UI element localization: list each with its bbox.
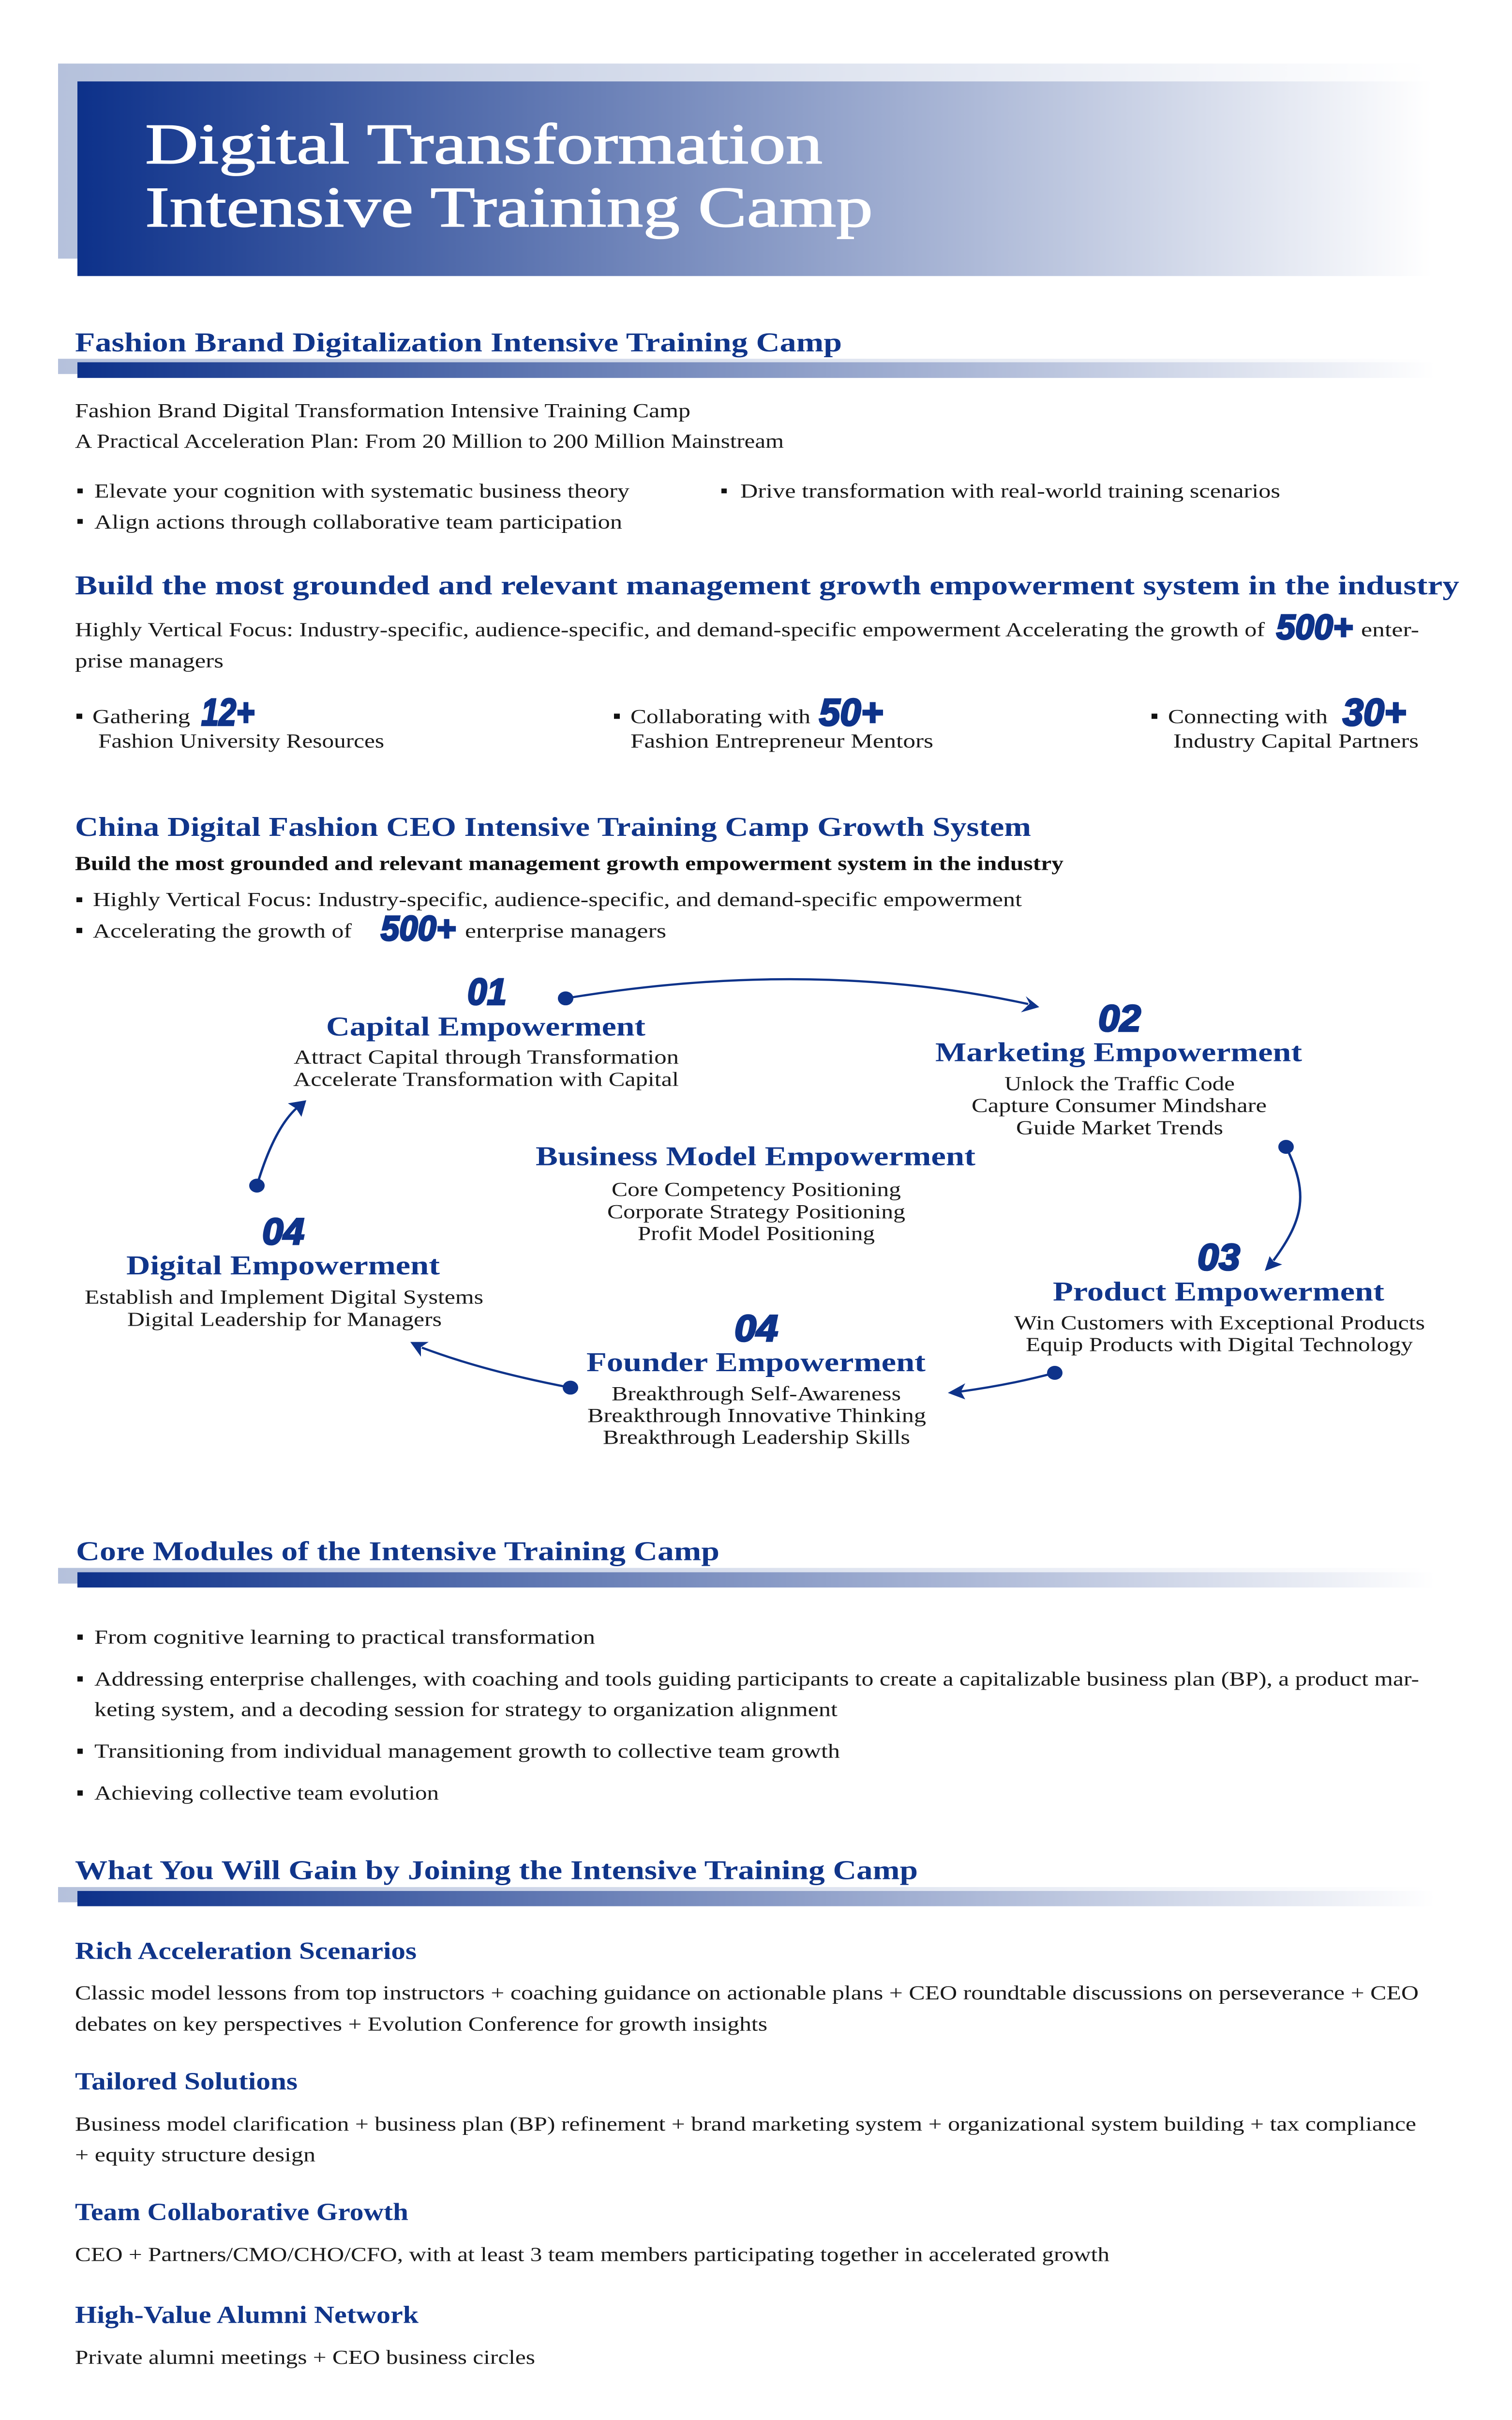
center: business model: Business Model Empowerment bbox=[536, 1141, 975, 1171]
bullet list: keting system, and a decoding session for strategy to organization alignment bbox=[94, 1698, 838, 1721]
node 02: marketing: Marketing Empowerment bbox=[935, 1037, 1302, 1067]
heading: Build the most grounded and relevant management growth empowerment system in the industry bbox=[75, 570, 1459, 600]
stat: 50+: 50+ bbox=[819, 691, 883, 734]
center: business model: Profit Model Positioning bbox=[638, 1223, 875, 1245]
gain: rich acceleration scenarios bbox=[75, 1937, 1419, 2035]
paragraph: enter- bbox=[1361, 619, 1419, 641]
cycle diagram bbox=[85, 971, 1425, 1449]
heading: Fashion Brand Digitalization Intensive Training Camp bbox=[75, 327, 842, 357]
bullet: accelerating growth: 500+ bbox=[381, 909, 456, 948]
heading: China Digital Fashion CEO Intensive Training Camp Growth System bbox=[75, 812, 1031, 842]
gain: rich acceleration scenarios: Rich Acceleration Scenarios bbox=[75, 1937, 417, 1965]
section: what you will gain bbox=[58, 1855, 1435, 2368]
title banner bbox=[58, 63, 1432, 276]
node 04: digital: 04 bbox=[262, 1211, 304, 1253]
bullet list: Transitioning from individual management growth to collective team growth bbox=[94, 1740, 840, 1762]
node 01: capital: Attract Capital through Transformation bbox=[294, 1046, 679, 1068]
bullet list: From cognitive learning to practical transformation bbox=[94, 1626, 595, 1648]
gain: rich acceleration scenarios: Classic model lessons from top instructors + coaching guidance on actionable plans + CEO roundtable discussions on perseverance + CEO bbox=[75, 1982, 1419, 2004]
section: fashion brand digitalization bbox=[58, 327, 1435, 533]
node 04: digital: Digital Leadership for Managers bbox=[127, 1308, 442, 1331]
stat: 12+: 12+ bbox=[201, 691, 254, 734]
node 02: marketing: Guide Market Trends bbox=[1016, 1117, 1223, 1139]
bullet list bbox=[77, 480, 1280, 533]
node 04: digital: Digital Empowerment bbox=[126, 1250, 440, 1280]
gain: high-value alumni network: High-Value Alumni Network bbox=[75, 2301, 419, 2329]
node 03: product: 03 bbox=[1198, 1237, 1240, 1278]
arrow: 01 to 02 bbox=[558, 979, 1039, 1013]
heading bar bbox=[58, 1887, 1435, 1906]
node 04: digital bbox=[85, 1211, 483, 1331]
node 04: founder: Breakthrough Self-Awareness bbox=[612, 1383, 901, 1405]
heading: What You Will Gain by Joining the Intensive Training Camp bbox=[75, 1855, 918, 1885]
subheading: Build the most grounded and relevant management growth empowerment system in the industry bbox=[75, 852, 1063, 875]
stat: 30+ bbox=[1152, 691, 1419, 752]
stat: 12+ bbox=[76, 691, 384, 752]
stat: 30+: Connecting with bbox=[1168, 706, 1328, 728]
node 01: capital: Accelerate Transformation with Capital bbox=[293, 1069, 679, 1090]
node 04: founder: Founder Empowerment bbox=[586, 1347, 926, 1377]
paragraph: prise managers bbox=[75, 650, 224, 672]
bullet list: Addressing enterprise challenges, with coaching and tools guiding participants to create a capitalizable business plan (BP), a product mar- bbox=[94, 1668, 1419, 1690]
node 02: marketing: 02 bbox=[1098, 998, 1141, 1039]
intro text: A Practical Acceleration Plan: From 20 Million to 200 Million Mainstream bbox=[75, 430, 784, 452]
node 01: capital: Capital Empowerment bbox=[326, 1011, 645, 1042]
bullet list bbox=[77, 1626, 1419, 1804]
node 03: product bbox=[1014, 1237, 1425, 1356]
bullet list: Drive transformation with real-world training scenarios bbox=[740, 480, 1280, 502]
section: growth system bbox=[75, 812, 1063, 948]
gain: rich acceleration scenarios: debates on key perspectives + Evolution Conference for growth insights bbox=[75, 2013, 767, 2035]
center: business model: Corporate Strategy Positioning bbox=[607, 1201, 905, 1223]
gain: high-value alumni network: Private alumni meetings + CEO business circles bbox=[75, 2346, 535, 2368]
node 03: product: Equip Products with Digital Technology bbox=[1026, 1334, 1413, 1356]
stat: 50+: Fashion Entrepreneur Mentors bbox=[630, 730, 933, 752]
arrow: 02 to 03 bbox=[1265, 1140, 1300, 1271]
title: Digital Transformation bbox=[145, 112, 823, 176]
bullet list: Elevate your cognition with systematic business theory bbox=[94, 480, 629, 502]
arrow: 03 to founder bbox=[948, 1366, 1063, 1399]
gain: team collaborative growth: CEO + Partners/CMO/CHO/CFO, with at least 3 team members participating together in accelerated growth bbox=[75, 2244, 1109, 2266]
intro text: Fashion Brand Digital Transformation Intensive Training Camp bbox=[75, 400, 690, 422]
bullet: vertical focus: Highly Vertical Focus: Industry-specific, audience-specific, and demand-specific empowerment bbox=[93, 889, 1022, 911]
gain: tailored solutions: Tailored Solutions bbox=[75, 2068, 298, 2095]
node 01: capital bbox=[293, 971, 679, 1090]
stat: 12+: Fashion University Resources bbox=[98, 730, 384, 752]
heading bar bbox=[58, 1568, 1435, 1588]
node 04: founder: 04 bbox=[734, 1308, 778, 1349]
section: core modules bbox=[58, 1536, 1435, 1804]
node 04: founder bbox=[586, 1308, 926, 1449]
gain: tailored solutions: + equity structure design bbox=[75, 2144, 315, 2166]
center: business model bbox=[536, 1141, 975, 1245]
stat: 30+: Industry Capital Partners bbox=[1173, 730, 1419, 752]
section: management growth system bbox=[75, 570, 1459, 752]
center: business model: Core Competency Positioning bbox=[612, 1179, 901, 1201]
bullet list: Align actions through collaborative team participation bbox=[94, 511, 622, 533]
stat: 50+: Collaborating with bbox=[630, 706, 810, 728]
stat: 12+: Gathering bbox=[92, 706, 190, 728]
stat: 50+ bbox=[614, 691, 933, 752]
node 01: capital: 01 bbox=[467, 971, 507, 1013]
node 03: product: Product Empowerment bbox=[1053, 1276, 1384, 1306]
heading: Core Modules of the Intensive Training Camp bbox=[76, 1536, 719, 1566]
node 04: founder: Breakthrough Innovative Thinking bbox=[587, 1405, 926, 1427]
node 02: marketing: Capture Consumer Mindshare bbox=[972, 1095, 1267, 1117]
paragraph: 500+ bbox=[1276, 608, 1353, 647]
gain: tailored solutions bbox=[75, 2068, 1416, 2166]
title: Intensive Training Camp bbox=[145, 176, 873, 239]
paragraph bbox=[75, 608, 1419, 672]
intro text bbox=[75, 400, 784, 452]
arrow: founder to digital bbox=[410, 1342, 578, 1394]
node 04: founder: Breakthrough Leadership Skills bbox=[603, 1426, 910, 1449]
paragraph: Highly Vertical Focus: Industry-specific, audience-specific, and demand-specific empowerment Accelerating the growth of bbox=[75, 619, 1265, 641]
bullet: accelerating growth bbox=[76, 909, 666, 948]
stat: 30+: 30+ bbox=[1343, 691, 1406, 734]
gain: high-value alumni network bbox=[75, 2301, 535, 2368]
bullet: accelerating growth: Accelerating the growth of bbox=[93, 920, 352, 942]
title bbox=[145, 112, 873, 239]
node 03: product: Win Customers with Exceptional Products bbox=[1014, 1312, 1425, 1334]
bullet list: Achieving collective team evolution bbox=[94, 1782, 439, 1804]
heading bar bbox=[58, 359, 1435, 378]
node 02: marketing: Unlock the Traffic Code bbox=[1004, 1073, 1235, 1095]
gain: tailored solutions: Business model clarification + business plan (BP) refinement + brand marketing system + organizational system building + tax compliance bbox=[75, 2113, 1416, 2135]
bullet: accelerating growth: enterprise managers bbox=[465, 920, 666, 942]
node 02: marketing bbox=[935, 998, 1302, 1139]
gain: team collaborative growth bbox=[75, 2199, 1109, 2266]
gain: team collaborative growth: Team Collaborative Growth bbox=[75, 2199, 408, 2225]
arrow: digital to capital bbox=[249, 1100, 306, 1193]
node 04: digital: Establish and Implement Digital Systems bbox=[85, 1286, 483, 1308]
